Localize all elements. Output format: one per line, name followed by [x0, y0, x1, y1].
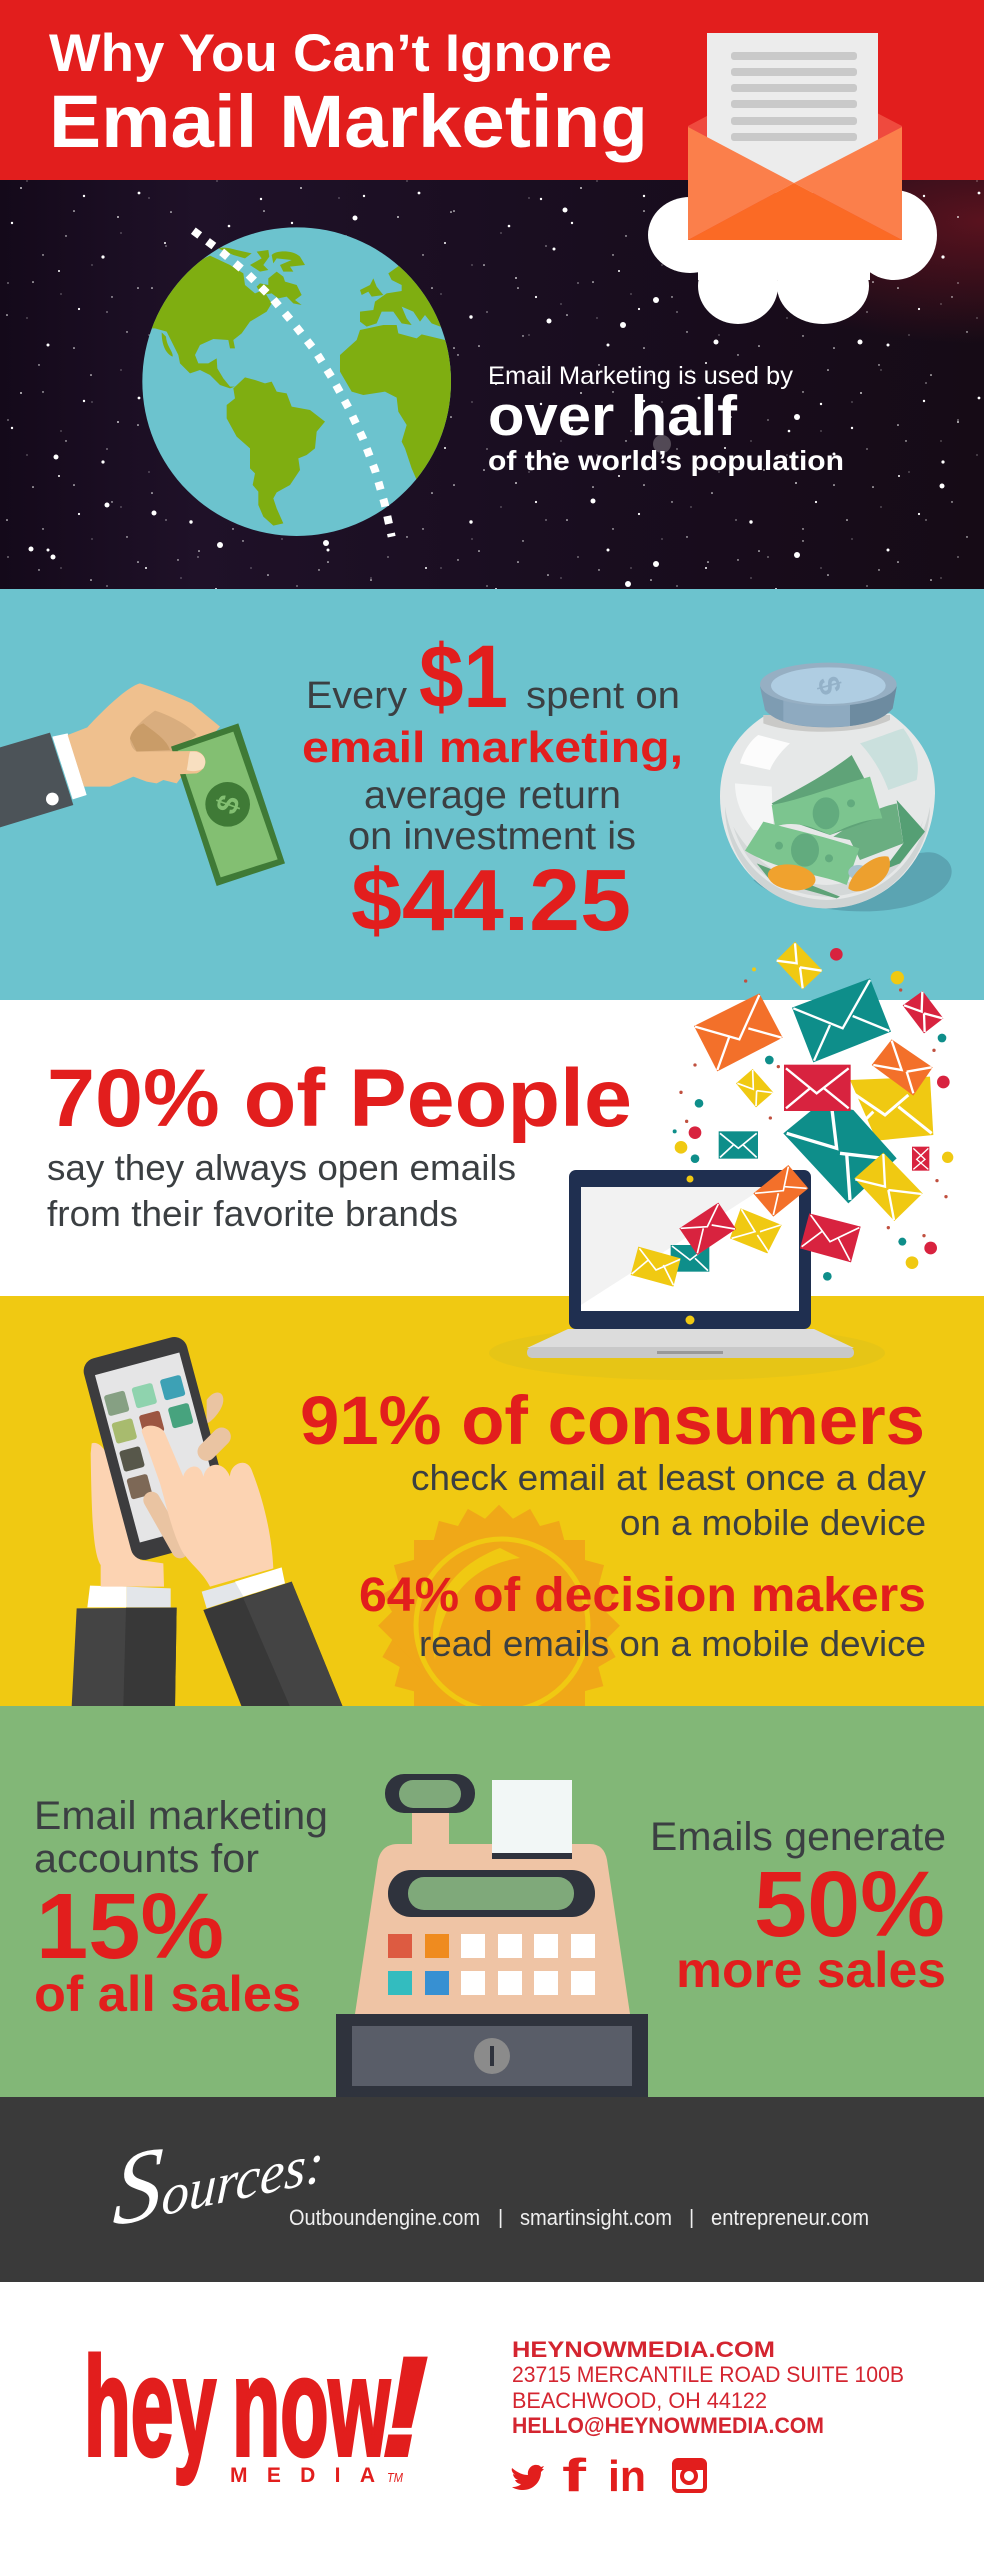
logo: hey now media: !	[381, 2328, 428, 2485]
icon: money jar: $	[810, 673, 848, 698]
panel: 70 percent of people	[0, 1000, 984, 1296]
text: contact details: HELLO@HEYNOWMEDIA.COM	[512, 2413, 824, 2438]
envelope: laptop red left	[679, 1203, 736, 1255]
icon: facebook: f	[562, 2449, 587, 2501]
envelope: laptop yellow	[730, 1208, 782, 1253]
envelope: yellow large	[850, 1077, 933, 1141]
text: contact details: BEACHWOOD, OH 44122	[512, 2388, 767, 2413]
text: 91% and 64% stats	[300, 1382, 926, 1664]
icon: cash register	[336, 1774, 648, 2099]
panel: space with globe	[0, 180, 984, 589]
text: source list: |	[498, 2207, 503, 2229]
text: 15% of all sales: accounts for	[34, 1837, 259, 1881]
envelope: yellow lower	[854, 1153, 923, 1221]
text: every dollar spent: average return	[364, 774, 621, 817]
title: Email Marketing	[49, 80, 648, 163]
text: 50% more sales	[650, 1815, 946, 1998]
icon: linkedin: in	[608, 2452, 646, 2501]
text: source list: smartinsight.com	[520, 2205, 672, 2230]
logo: hey now media: hey	[84, 2328, 216, 2485]
text: over half: over half	[488, 384, 738, 448]
text: 15% of all sales: 15%	[36, 1874, 224, 1978]
logo: hey now media: now	[232, 2328, 391, 2485]
icons: social media	[512, 2449, 705, 2501]
logo: hey now media	[84, 2328, 428, 2487]
text: every dollar spent: on investment is	[348, 815, 636, 858]
text: every dollar spent: Every	[306, 675, 407, 717]
icon: twitter	[512, 2465, 544, 2490]
text: every dollar spent	[302, 626, 683, 949]
icon: sun	[378, 1505, 620, 1747]
envelope: red centre	[784, 1065, 851, 1111]
icon: hand holding dollar bill: $	[209, 791, 247, 818]
envelope: small yellow top	[776, 942, 823, 989]
text: 50% more sales: more sales	[676, 1942, 946, 1998]
envelope: laptop orange	[753, 1165, 808, 1217]
text: every dollar spent: spent on	[526, 675, 680, 717]
text: source list	[289, 2205, 869, 2230]
envelope: orange right	[872, 1039, 933, 1096]
text: source list: |	[689, 2207, 694, 2229]
text: 15% of all sales: Email marketing	[34, 1794, 328, 1838]
icon: hand holding dollar bill	[0, 683, 285, 886]
icon: hands holding phone	[72, 1334, 343, 1707]
panel: mobile device stats	[0, 1296, 984, 1747]
envelope: laptop red right	[800, 1213, 861, 1262]
text: 91% and 64% stats: 91% of consumers	[300, 1382, 925, 1459]
text: over half	[488, 362, 844, 476]
text: 91% and 64% stats: read emails on a mobile device	[419, 1623, 926, 1664]
panel: sales stats	[0, 1706, 984, 2099]
panel: return on investment	[0, 589, 984, 1000]
icon: money jar	[720, 663, 952, 911]
text: source list: Outboundengine.com	[289, 2205, 480, 2230]
text: always open emails: say they always open emails	[47, 1147, 516, 1188]
logo: hey now media: MEDIA	[230, 2464, 375, 2487]
envelope: small yellow left	[736, 1069, 773, 1107]
text: 50% more sales: Emails generate	[650, 1815, 946, 1859]
panel: header banner	[0, 0, 984, 180]
envelope: orange	[694, 993, 783, 1071]
title	[49, 24, 648, 163]
text: contact details: 23715 MERCANTILE ROAD SUITE 100B	[512, 2362, 904, 2387]
icon: flying envelopes	[631, 942, 953, 1287]
text: over half: of the world’s population	[488, 445, 844, 476]
envelope: small teal left	[719, 1131, 758, 1159]
text: contact details	[512, 2337, 904, 2438]
text: 15% of all sales	[34, 1794, 328, 2022]
text: 50% more sales: 50%	[754, 1852, 945, 1956]
envelope: laptop teal	[671, 1245, 709, 1272]
text: every dollar spent: $44.25	[351, 852, 631, 949]
text: source list: entrepreneur.com	[711, 2205, 869, 2230]
text: 15% of all sales: of all sales	[34, 1966, 301, 2022]
panel: footer	[0, 2282, 984, 2560]
logo: hey now media: TM	[387, 2470, 403, 2485]
text: every dollar spent: $1	[419, 626, 508, 726]
icon: envelope on cloud	[648, 33, 937, 324]
title: Why You Can’t Ignore	[49, 24, 612, 83]
envelope: small red right	[903, 991, 943, 1033]
envelope: tiny red	[912, 1147, 929, 1171]
text: always open emails: from their favorite brands	[47, 1193, 458, 1234]
icon: globe	[142, 227, 460, 537]
envelope: teal lower	[783, 1103, 897, 1203]
text: 91% and 64% stats: 64% of decision makers	[359, 1569, 926, 1622]
envelope: laptop yellow left	[631, 1247, 681, 1287]
text: always open emails	[47, 1147, 516, 1234]
panel: sources	[0, 2090, 984, 2282]
text: every dollar spent: email marketing,	[302, 723, 683, 772]
heading: sources: Sources:	[111, 2090, 328, 2249]
envelope: teal large	[792, 978, 891, 1062]
text: 91% and 64% stats: on a mobile device	[620, 1502, 926, 1543]
icon: laptop	[489, 1170, 885, 1380]
heading: 70% of people: 70% of People	[47, 1053, 632, 1144]
text: over half: Email Marketing is used by	[488, 362, 794, 390]
icon: instagram	[674, 2460, 705, 2491]
text: 91% and 64% stats: check email at least once a day	[411, 1457, 926, 1498]
text: contact details: HEYNOWMEDIA.COM	[512, 2337, 775, 2362]
